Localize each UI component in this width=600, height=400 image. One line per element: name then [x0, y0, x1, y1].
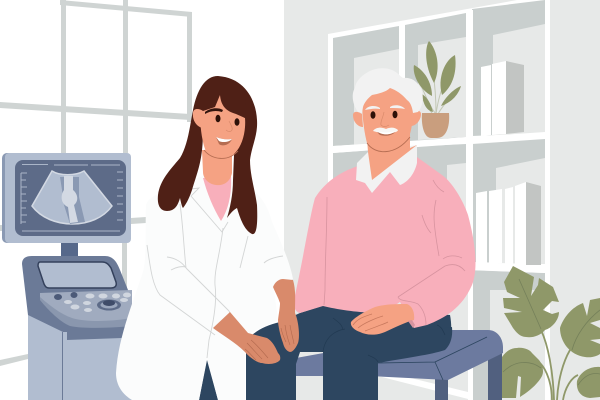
shelf cell: lower middle — [405, 144, 466, 262]
ultrasound sector image — [32, 171, 112, 224]
patient hair — [353, 68, 423, 113]
bench legs — [435, 352, 502, 400]
shelf cell: top middle — [405, 13, 466, 142]
patient eyebrows — [365, 105, 405, 110]
machine base — [28, 310, 132, 400]
patient mouth and moustache — [373, 128, 398, 136]
books: upper shelf — [481, 61, 524, 136]
doctor face — [193, 85, 246, 159]
doctor lab coat — [116, 176, 293, 400]
shelf cell: top left — [333, 26, 399, 146]
patient hand — [351, 304, 414, 335]
ultrasound machine — [2, 153, 132, 400]
doctor eyes — [216, 115, 240, 126]
console display — [38, 262, 116, 288]
shelf cell: lower left — [333, 148, 466, 400]
shelf cell: lower right — [472, 139, 545, 264]
shelf cell: top right — [472, 0, 545, 136]
patient head — [353, 68, 423, 153]
books: lower shelf — [476, 182, 541, 265]
bench — [296, 330, 503, 400]
patient — [246, 68, 475, 400]
patient nose — [381, 112, 389, 126]
patient trousers — [246, 305, 452, 400]
shelf cell: bottom right — [472, 270, 545, 400]
doctor pink top — [203, 176, 231, 221]
doctor eyebrow — [205, 108, 223, 114]
doctor neck — [202, 150, 232, 185]
monitor — [2, 153, 131, 243]
doctor left hand on knee — [213, 312, 280, 364]
doctor smile — [216, 137, 232, 145]
doctor right hand on knee — [273, 279, 299, 352]
monstera plant — [502, 266, 600, 400]
console buttons — [54, 292, 131, 312]
patient sweater — [294, 157, 475, 328]
control console — [22, 256, 132, 332]
doctor hair — [158, 76, 257, 234]
doctor trousers — [199, 360, 218, 400]
doctor nose — [226, 121, 232, 132]
bookshelf — [328, 0, 550, 400]
bench seat — [296, 330, 503, 380]
patient neck — [366, 125, 417, 180]
machine stem — [61, 243, 78, 257]
potted plant — [414, 41, 461, 138]
patient eyes — [370, 111, 398, 119]
monitor scale marks — [21, 164, 123, 231]
doctor — [116, 76, 299, 400]
patient shirt collar — [356, 145, 417, 193]
window frame — [0, 0, 192, 366]
